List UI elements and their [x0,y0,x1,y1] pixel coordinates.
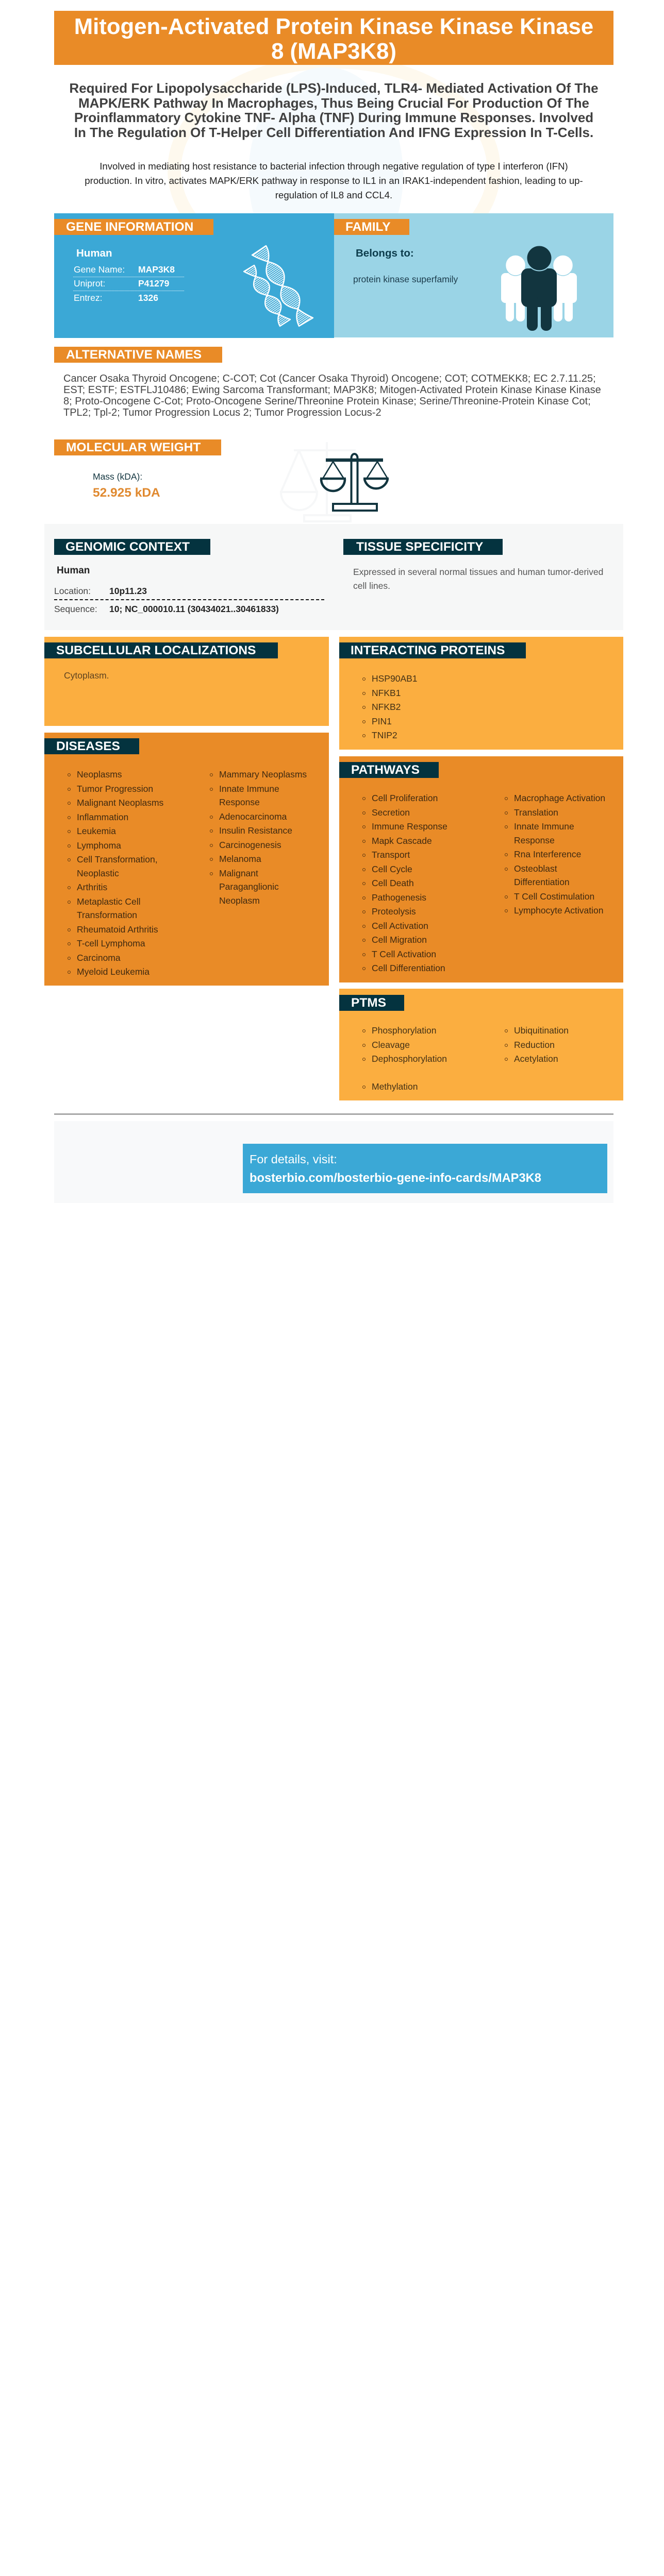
panel: interacting proteins [339,637,623,750]
disease list column 2: Mammary Neoplasms [219,769,307,779]
ptm list column 1: Phosphorylation [372,1025,436,1036]
gene details table: Gene Name: [74,264,125,275]
disease list column 2 [210,769,307,906]
icon: people group [501,246,577,331]
protein list: TNIP2 [372,730,397,740]
gene details table: Entrez: [74,293,102,303]
link intro: For details, visit: [250,1153,337,1166]
sequence row: 10; NC_000010.11 (30434021..30461833) [109,604,279,614]
pathway list column 1: Cell Proliferation [372,793,438,803]
ptm list column 1: Dephosphorylation [372,1054,447,1064]
gene details table: P41279 [138,278,169,289]
mass value: 52.925 kDA [93,486,160,500]
location row [54,586,324,600]
background watermark [168,65,501,213]
subtitle: Proinflammatory Cytokine TNF- Alpha (TNF) During Immune Responses. Involved [74,110,593,125]
heading: genomic context: GENOMIC CONTEXT [65,540,190,554]
heading: gene information: GENE INFORMATION [66,220,193,234]
gene details table: 1326 [138,293,158,303]
disease list column 2: Paraganglionic [219,882,279,892]
disease list column 2: Response [219,797,260,807]
location row: 10p11.23 [109,586,147,596]
disease list column 2: Neoplasm [219,895,260,906]
ptm list column 1 [362,1025,447,1092]
link url: bosterbio.com/bosterbio-gene-info-cards/MAP3K8 [250,1172,541,1185]
disease list column 1: Neoplastic [77,868,119,878]
pathway list column 1: T Cell Activation [372,949,436,959]
pathway list column 1: Cell Cycle [372,863,412,874]
pathway list column 1: Cell Death [372,878,414,888]
disease list column 2: Carcinogenesis [219,840,281,850]
ptm list column 1: Methylation [372,1081,418,1092]
protein list: HSP90AB1 [372,673,418,684]
heading: alternative names: ALTERNATIVE NAMES [66,348,202,362]
tissue specificity text [353,567,603,591]
disease list column 1: T-cell Lymphoma [77,938,145,948]
disease list column 1: Rheumatoid Arthritis [77,924,158,935]
family name: protein kinase superfamily [353,274,458,284]
panel: diseases [44,733,329,986]
panel: subcellular localizations [44,637,329,726]
disease list column 2: Innate Immune [219,783,279,793]
panel: footer [54,1121,613,1203]
heading: diseases: DISEASES [56,739,120,753]
pathway list column 1: Cell Migration [372,935,427,945]
panel: pathways [339,756,623,982]
heading: tissue specificity [343,539,503,555]
alternative names text [63,373,601,418]
heading: interacting proteins: INTERACTING PROTEINS [351,643,505,657]
subtitle: MAPK/ERK Pathway In Macrophages, Thus Being Crucial For Production Of The [78,95,589,111]
alternative names text: Cancer Osaka Thyroid Oncogene; C-COT; Cot (Cancer Osaka Thyroid) Oncogene; COT; COTMEKK8; EC 2.7.11.25; [63,373,596,384]
disease list column 1: Cell Transformation, [77,854,158,865]
pathway list column 2: Differentiation [514,877,570,887]
icon: balance scale ghost [280,442,356,522]
pathway list column 1: Immune Response [372,821,447,832]
disease list column 1: Metaplastic Cell [77,896,141,907]
heading: ptms: PTMS [351,996,386,1010]
belongs to label: Belongs to: [356,247,414,259]
protein list [362,673,418,740]
title: Mitogen-Activated Protein Kinase Kinase Kinase [74,14,593,39]
ptm list column 2 [505,1025,569,1064]
disease list column 2: Malignant [219,868,258,878]
heading: pathways [339,762,439,778]
heading: gene information [54,219,213,235]
protein list: NFKB1 [372,687,401,698]
summary paragraph: regulation of IL8 and CCL4. [275,190,392,200]
location row: Location: [54,586,91,596]
mass label: Mass (kDA): [93,471,142,482]
panel: family [334,213,613,337]
ptm list column 2: Acetylation [514,1054,558,1064]
pathway list column 1 [362,793,447,973]
summary paragraph: production. In vitro, activates MAPK/ERK pathway in response to IL1 in an IRAK1-independent fashion, leading to up- [85,175,583,186]
pathway list column 2: Innate Immune [514,821,574,832]
disease list column 1: Lymphoma [77,840,121,850]
species label: Human [57,565,90,576]
pathway list column 1: Secretion [372,807,410,817]
disease list column 2: Melanoma [219,854,261,864]
protein list: PIN1 [372,716,392,726]
tissue specificity text: Expressed in several normal tissues and human tumor-derived [353,567,603,577]
summary paragraph: Involved in mediating host resistance to bacterial infection through negative regulation of type I interferon (IFN) [99,161,568,172]
icon: dna helix [243,245,313,327]
disease list column 1 [68,769,163,977]
pathway list column 1: Proteolysis [372,906,416,917]
pathway list column 2: Osteoblast [514,863,557,874]
disease list column 2: Adenocarcinoma [219,811,287,821]
subtitle [69,80,599,140]
title: 8 (MAP3K8) [271,39,396,64]
gene details table: MAP3K8 [138,264,175,275]
alternative names text: EST; ESTF; ESTFLJ10486; Ewing Sarcoma Transformant; MAP3K8; Mitogen-Activated Protein Kinase Kinase Kinase [63,384,601,396]
heading: molecular weight: MOLECULAR WEIGHT [66,440,201,454]
tissue specificity text: cell lines. [353,581,390,591]
disease list column 1: Carcinoma [77,952,121,962]
heading: pathways: PATHWAYS [351,763,420,777]
heading: diseases [44,738,139,754]
alternative names text: TPL2; Tpl-2; Tumor Progression Locus 2; Tumor Progression Locus-2 [63,407,381,418]
gene details table [73,264,184,303]
pathway list column 1: Transport [372,850,410,860]
panel: genomic context and tissue specificity [44,524,623,630]
disease list column 1: Myeloid Leukemia [77,967,150,977]
pathway list column 1: Mapk Cascade [372,836,432,846]
disease list column 2: Insulin Resistance [219,825,292,836]
localization text: Cytoplasm. [64,670,109,681]
pathway list column 1: Cell Differentiation [372,963,445,973]
disease list column 1: Leukemia [77,826,116,836]
pathway list column 2: Response [514,835,555,845]
protein list: NFKB2 [372,702,401,712]
species label: Human [76,247,112,259]
disease list column 1: Transformation [77,910,137,920]
ptm list column 1: Cleavage [372,1040,410,1050]
subtitle: In The Regulation Of T-Helper Cell Differentiation And IFNG Expression In T-Cells. [74,125,593,140]
pathway list column 2: Rna Interference [514,849,581,859]
ptm list column 2: Reduction [514,1040,555,1050]
heading: genomic context [54,539,210,555]
heading: ptms [339,995,404,1011]
ptm list column 2: Ubiquitination [514,1025,569,1036]
pathway list column 1: Pathogenesis [372,892,426,903]
pathway list column 2: Lymphocyte Activation [514,905,603,916]
icon: balance scale [320,453,389,512]
heading: subcellular localizations: SUBCELLULAR LOCALIZATIONS [56,643,256,657]
disease list column 1: Inflammation [77,812,128,822]
gene details table: Uniprot: [74,278,105,289]
pathway list column 2: T Cell Costimulation [514,891,594,902]
panel: ptms [339,989,623,1100]
callout: details link [243,1144,607,1193]
subtitle: Required For Lipopolysaccharide (LPS)-Induced, TLR4- Mediated Activation Of The [69,80,599,96]
pathway list column 2: Macrophage Activation [514,793,605,803]
alternative names text: 8; Proto-Oncogene C-Cot; Proto-Oncogene Serine/Threonine Protein Kinase; Serine/Threonine-Protein Kinase Cot; [63,396,591,407]
title [54,11,613,65]
pathway list column 1: Cell Activation [372,920,428,930]
pathway list column 2 [505,793,605,916]
heading: family: FAMILY [345,220,391,234]
heading: tissue specificity: TISSUE SPECIFICITY [356,540,483,554]
sequence row: Sequence: [54,604,97,614]
summary paragraph [85,161,583,200]
disease list column 1: Neoplasms [77,769,122,779]
pathway list column 2: Translation [514,807,558,817]
disease list column 1: Malignant Neoplasms [77,798,163,808]
disease list column 1: Tumor Progression [77,783,153,793]
disease list column 1: Arthritis [77,882,107,892]
heading: family [334,219,409,235]
panel: gene information [54,213,334,338]
